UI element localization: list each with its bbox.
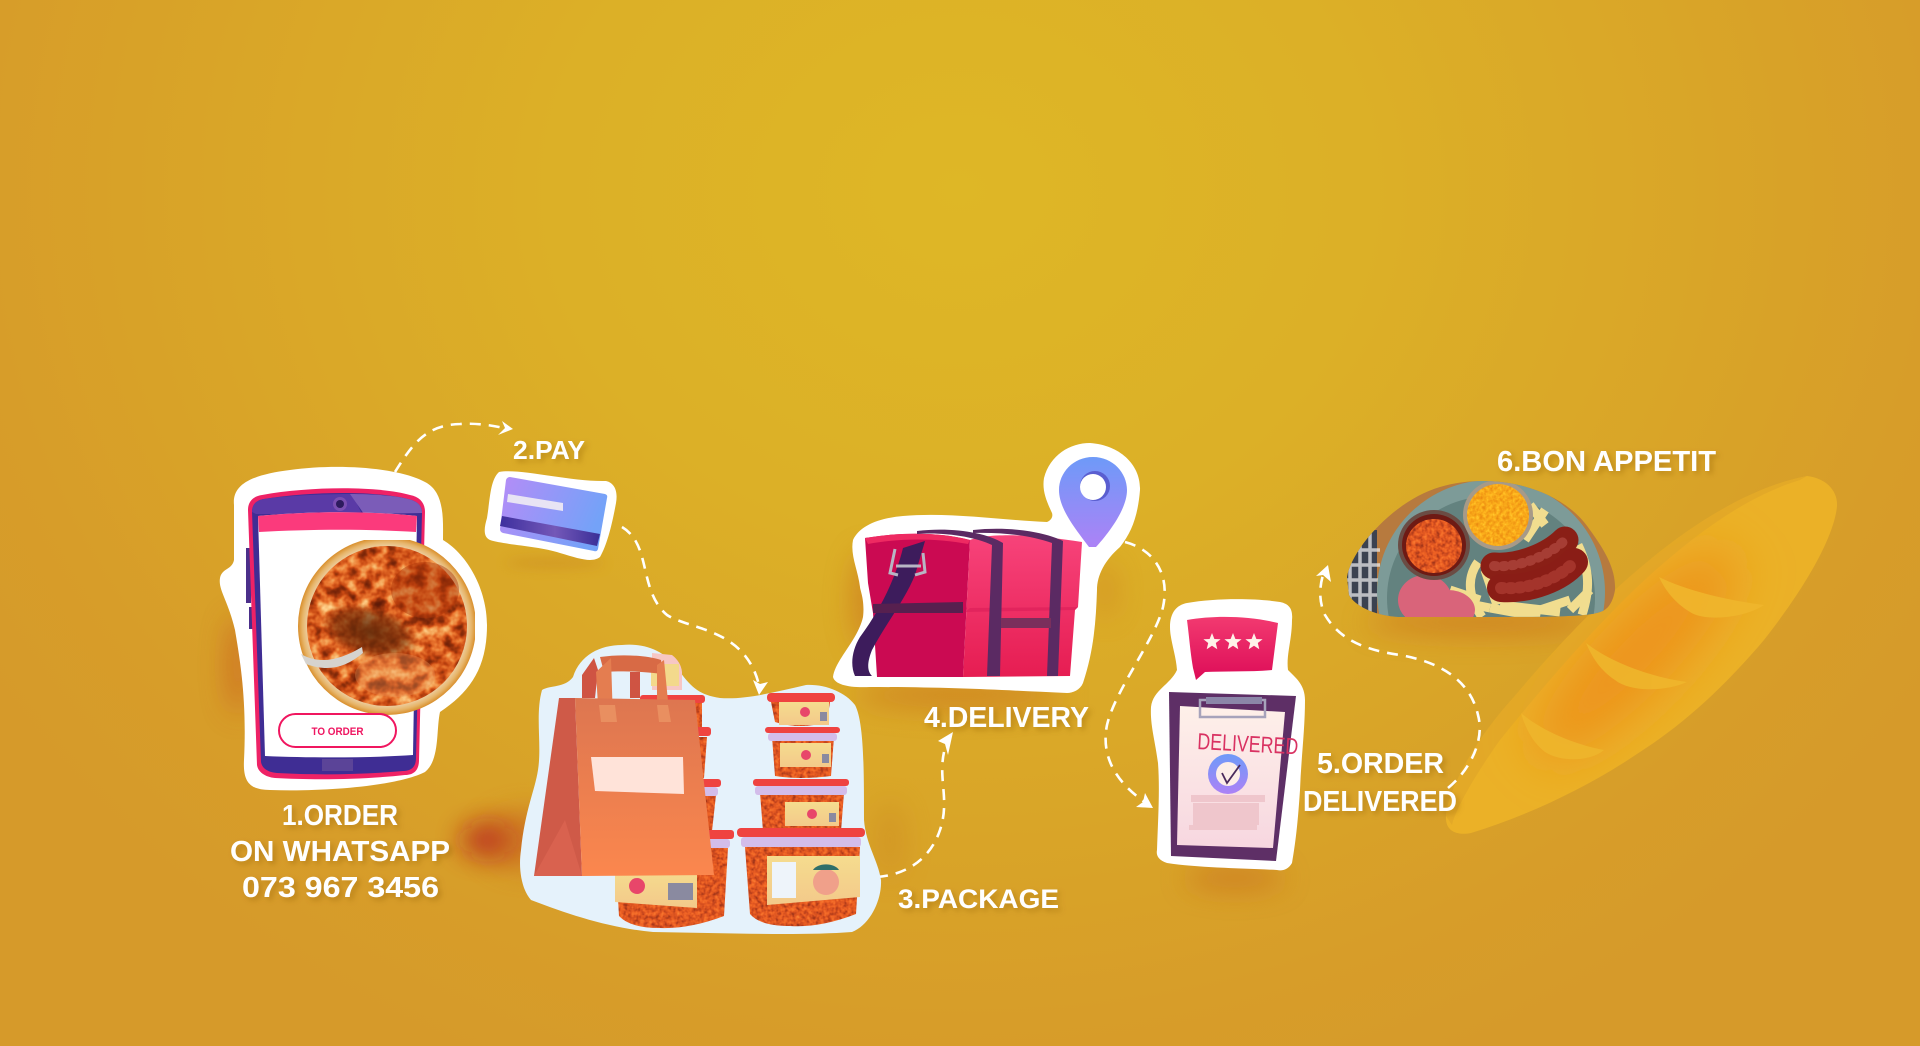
box right face <box>963 535 1082 677</box>
sticker outline <box>220 467 487 790</box>
label 5: 5.ORDER <box>1317 748 1444 780</box>
faded receipt block <box>1189 795 1265 830</box>
clipboard board <box>1169 692 1296 861</box>
dashed arrow: step 4 to step 5 <box>1106 542 1165 808</box>
clipboard clip <box>1200 697 1265 717</box>
stars <box>1203 633 1263 649</box>
food bowl photo <box>298 537 476 715</box>
magnetic band <box>500 516 600 546</box>
fries <box>1440 505 1590 617</box>
ham slices <box>1398 576 1475 617</box>
card face <box>500 477 607 551</box>
wood board <box>1347 481 1615 615</box>
bread illustration <box>1446 476 1837 834</box>
label 5 <box>1303 748 1457 818</box>
right container stack <box>737 693 865 926</box>
step 2: payment card <box>485 471 617 560</box>
sticker outline <box>485 471 617 560</box>
to order button <box>279 714 396 747</box>
delivered stamp text: DELIVERED <box>1197 728 1299 759</box>
step 6: plate of food <box>1347 481 1615 617</box>
left container stack <box>615 653 734 928</box>
step 4: delivery bag with location pin <box>833 443 1140 693</box>
sticker outline <box>520 645 881 934</box>
screen header <box>258 512 417 532</box>
label 1: 1.ORDER <box>282 800 398 832</box>
phone body <box>248 488 425 779</box>
sticker outline <box>1151 599 1305 870</box>
cheese bowl <box>1463 480 1533 550</box>
buckle <box>890 549 925 575</box>
step 3: package with containers and paper bag <box>520 645 881 934</box>
dashed arrow: step 5 to step 6 <box>1316 565 1480 788</box>
dashed arrow: step 2 to step 3 <box>622 527 768 695</box>
pickle bowl <box>1398 510 1470 580</box>
bag handles <box>582 658 598 698</box>
dashed arrow: step 1 to step 2 <box>395 421 513 472</box>
vertical straps <box>917 530 1003 676</box>
rating bubble <box>1187 617 1278 680</box>
phone screen <box>258 512 417 757</box>
label 4: 4.DELIVERY <box>924 702 1089 734</box>
sticker outline <box>833 443 1140 693</box>
label 2: 2.PAY <box>513 435 585 465</box>
sausages <box>1494 540 1574 588</box>
location pin <box>1059 457 1127 547</box>
step labels <box>230 435 1716 914</box>
label 1: 073 967 3456 <box>242 872 439 904</box>
left jar label <box>615 870 697 908</box>
dashed arrow: step 3 to step 4 <box>877 732 953 877</box>
label 6: 6.BON APPETIT <box>1497 446 1716 478</box>
label 1: ON WHATSAPP <box>230 836 450 868</box>
signature strip <box>507 494 563 511</box>
soft shadows behind stickers <box>228 550 1595 890</box>
plate <box>1377 481 1605 617</box>
check badge <box>1208 754 1248 794</box>
bread slashes <box>1521 577 1764 759</box>
checkered cloth <box>1347 530 1380 614</box>
label 3: 3.PACKAGE <box>898 884 1059 914</box>
shoulder strap <box>852 541 925 676</box>
home button <box>322 759 353 771</box>
step 5: clipboard with rating <box>1151 599 1305 870</box>
bag label patch <box>591 757 684 794</box>
bag side <box>534 698 582 876</box>
label 1 <box>230 800 450 904</box>
phone side buttons <box>246 548 253 629</box>
label 5: DELIVERED <box>1303 786 1457 818</box>
step 1: phone with food bowl <box>220 467 487 790</box>
clipboard paper <box>1177 706 1285 848</box>
to order button: TO ORDER <box>312 726 364 738</box>
bag front <box>575 698 714 876</box>
paper bag <box>534 655 714 876</box>
right jar label <box>767 856 860 905</box>
box left face <box>865 534 970 677</box>
phone camera <box>333 497 347 511</box>
spoon <box>301 647 363 668</box>
